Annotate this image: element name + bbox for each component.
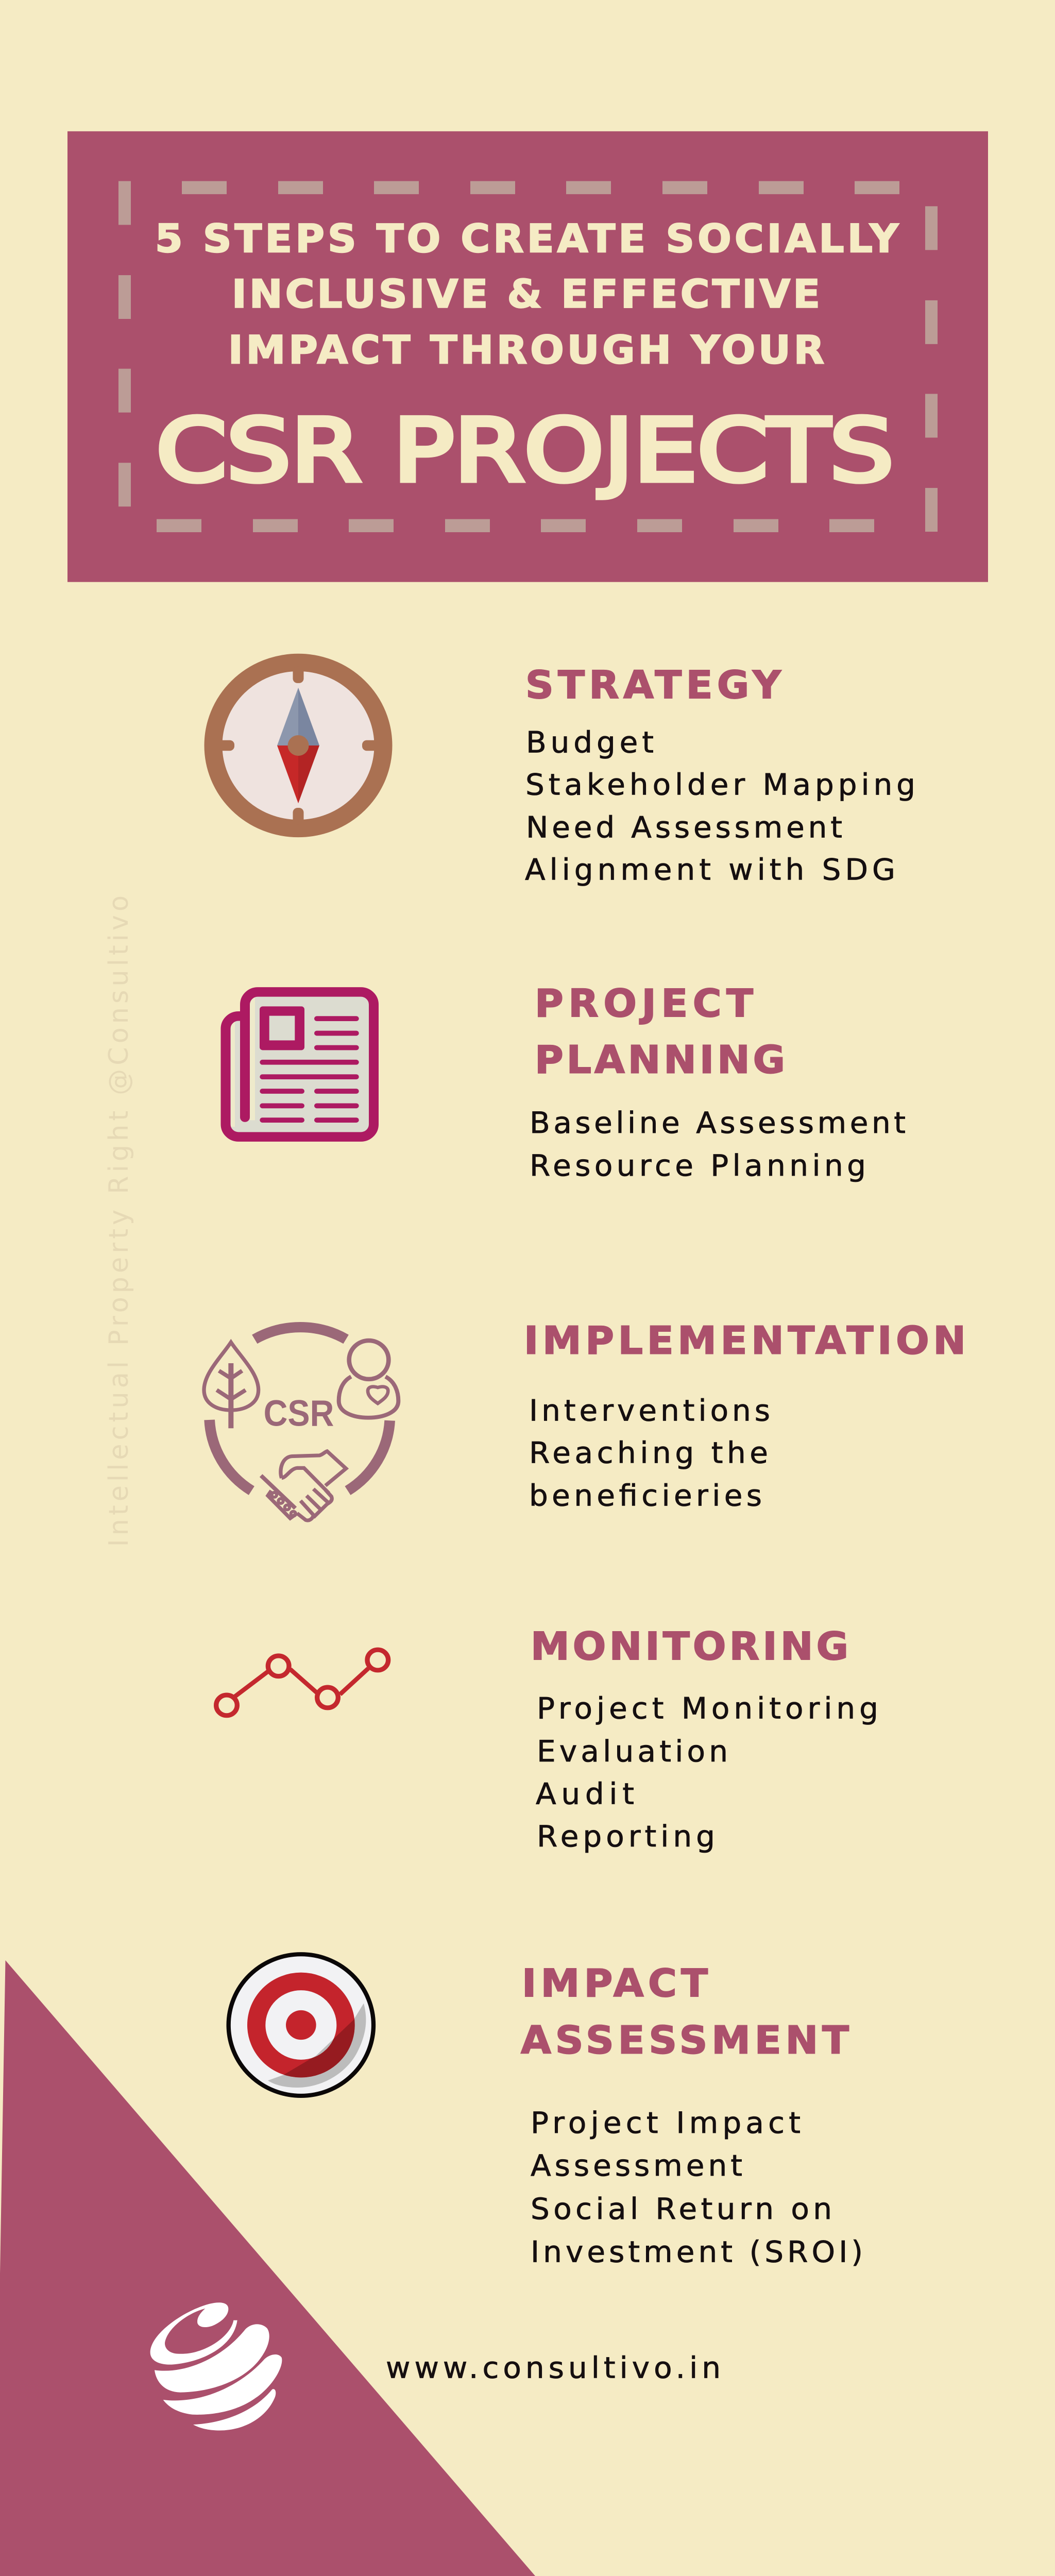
section: implementation (524, 1318, 966, 1513)
title: intro lines: 5 STEPS TO CREATE SOCIALLY (155, 216, 899, 261)
title: intro lines: IMPACT THROUGH YOUR (228, 327, 824, 372)
list: monitoring items: Reporting (537, 1820, 715, 1854)
website url: www.consultivo.in (386, 2351, 721, 2385)
list: monitoring items: Audit (536, 1777, 634, 1811)
watermark: intellectual property: Intellectual Property Right @Consultivo (103, 895, 134, 1547)
list: impact items: Social Return on (531, 2192, 832, 2226)
section: strategy (525, 663, 915, 887)
icon: newspaper (226, 992, 374, 1137)
title: intro lines (155, 216, 899, 372)
icon: line chart (216, 1650, 388, 1716)
heading: project planning (535, 981, 785, 1082)
icon: CSR emblem: CSR (264, 1393, 334, 1434)
title: intro lines: INCLUSIVE & EFFECTIVE (232, 271, 820, 316)
heading: impact assessment: ASSESSMENT (521, 2018, 849, 2062)
list: planning items (530, 1106, 906, 1183)
list: strategy items: Stakeholder Mapping (525, 768, 915, 802)
list: impact items: Project Impact (531, 2106, 801, 2140)
corner triangle (0, 1960, 535, 2576)
icon: compass (213, 663, 383, 828)
list: implementation items: Interventions (529, 1394, 770, 1428)
list: strategy items: Need Assessment (526, 810, 842, 844)
list: strategy items: Alignment with SDG (525, 853, 895, 887)
list: monitoring items (536, 1691, 878, 1854)
list: monitoring items: Project Monitoring (537, 1691, 878, 1725)
list: implementation items: beneficieries (529, 1479, 762, 1513)
icon: consultivo logo (150, 2302, 282, 2431)
section: project planning (530, 981, 906, 1183)
heading: strategy: STRATEGY (525, 663, 782, 707)
list: planning items: Baseline Assessment (530, 1106, 906, 1140)
list: impact items: Investment (SROI) (531, 2235, 863, 2269)
list: implementation items: Reaching the (529, 1436, 768, 1470)
section: monitoring (531, 1624, 878, 1854)
list: impact items: Assessment (531, 2148, 742, 2183)
list: implementation items (529, 1394, 770, 1513)
heading: implementation: IMPLEMENTATION (524, 1318, 966, 1363)
icon: CSR emblem (204, 1327, 398, 1520)
heading: monitoring: MONITORING (531, 1624, 848, 1669)
list: planning items: Resource Planning (530, 1148, 866, 1183)
heading: impact assessment: IMPACT (522, 1961, 708, 2006)
list: impact items (531, 2106, 863, 2269)
heading: project planning: PLANNING (535, 1037, 785, 1082)
heading: impact assessment (521, 1961, 849, 2062)
list: monitoring items: Evaluation (537, 1735, 728, 1769)
list: strategy items: Budget (526, 725, 654, 759)
icon: target (229, 1954, 373, 2096)
list: strategy items (525, 725, 915, 887)
dashed frame (118, 181, 938, 532)
heading: project planning: PROJECT (535, 981, 753, 1026)
section: impact assessment (521, 1961, 863, 2269)
title: CSR PROJECTS: CSR PROJECTS (156, 400, 894, 501)
panel: title banner (67, 131, 988, 582)
